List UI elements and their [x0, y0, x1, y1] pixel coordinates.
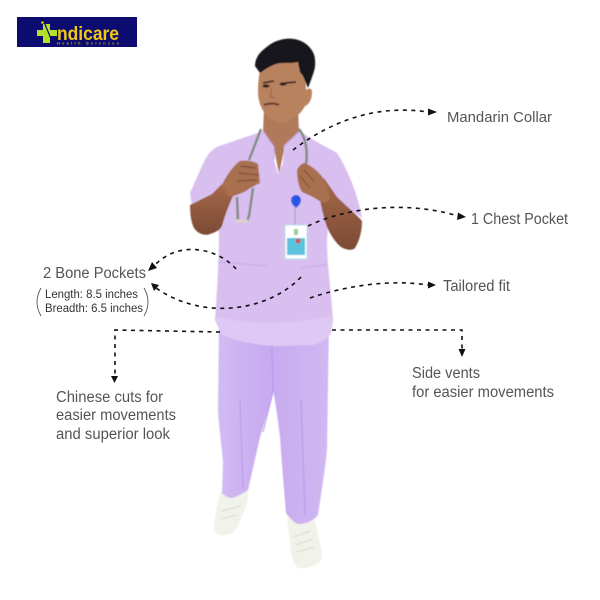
logo: Indicare: Health Sciences	[57, 40, 120, 46]
label: 2 Bone Pockets: 2 Bone Pockets	[43, 265, 146, 282]
arms and hands	[190, 161, 362, 250]
pocket dimensions: Length: 8.5 inches	[45, 289, 138, 301]
arrow: lower bone pocket	[151, 277, 301, 308]
short sleeve shirt	[190, 131, 362, 346]
logo: Indicare: ndicare	[57, 24, 119, 45]
pocket dimensions	[37, 288, 148, 316]
label: side vents: Side vents	[412, 365, 480, 382]
label: side vents: for easier movements	[412, 384, 554, 401]
person wearing lavender scrubs	[190, 39, 362, 568]
arrow: tailored fit	[310, 282, 436, 298]
ID card	[285, 225, 307, 259]
neck	[263, 108, 299, 174]
label: Tailored fit: Tailored fit	[443, 278, 511, 295]
stethoscope	[236, 129, 307, 221]
arrow: side vents	[332, 330, 466, 357]
trousers	[218, 320, 329, 524]
label: side vents	[412, 365, 554, 401]
head	[258, 62, 312, 122]
label: Mandarin Collar: Mandarin Collar	[447, 109, 552, 126]
label: 1 Chest Pocket: 1 Chest Pocket	[471, 211, 569, 228]
shoes	[214, 489, 322, 568]
label: chinese cuts	[56, 389, 176, 443]
hair	[255, 39, 315, 88]
label: chinese cuts: and superior look	[56, 426, 170, 443]
logo: Indicare	[17, 17, 137, 47]
pocket dimensions: Breadth: 6.5 inches	[45, 303, 143, 315]
badge cord	[294, 208, 296, 225]
arrow: upper bone pocket	[148, 249, 236, 271]
label: chinese cuts: easier movements	[56, 407, 176, 424]
label: chinese cuts: Chinese cuts for	[56, 389, 163, 406]
arrow: chinese cuts	[111, 330, 220, 383]
arrow: mandarin collar	[293, 108, 437, 150]
retractable badge reel	[291, 195, 301, 208]
arrow: chest pocket	[308, 207, 466, 226]
